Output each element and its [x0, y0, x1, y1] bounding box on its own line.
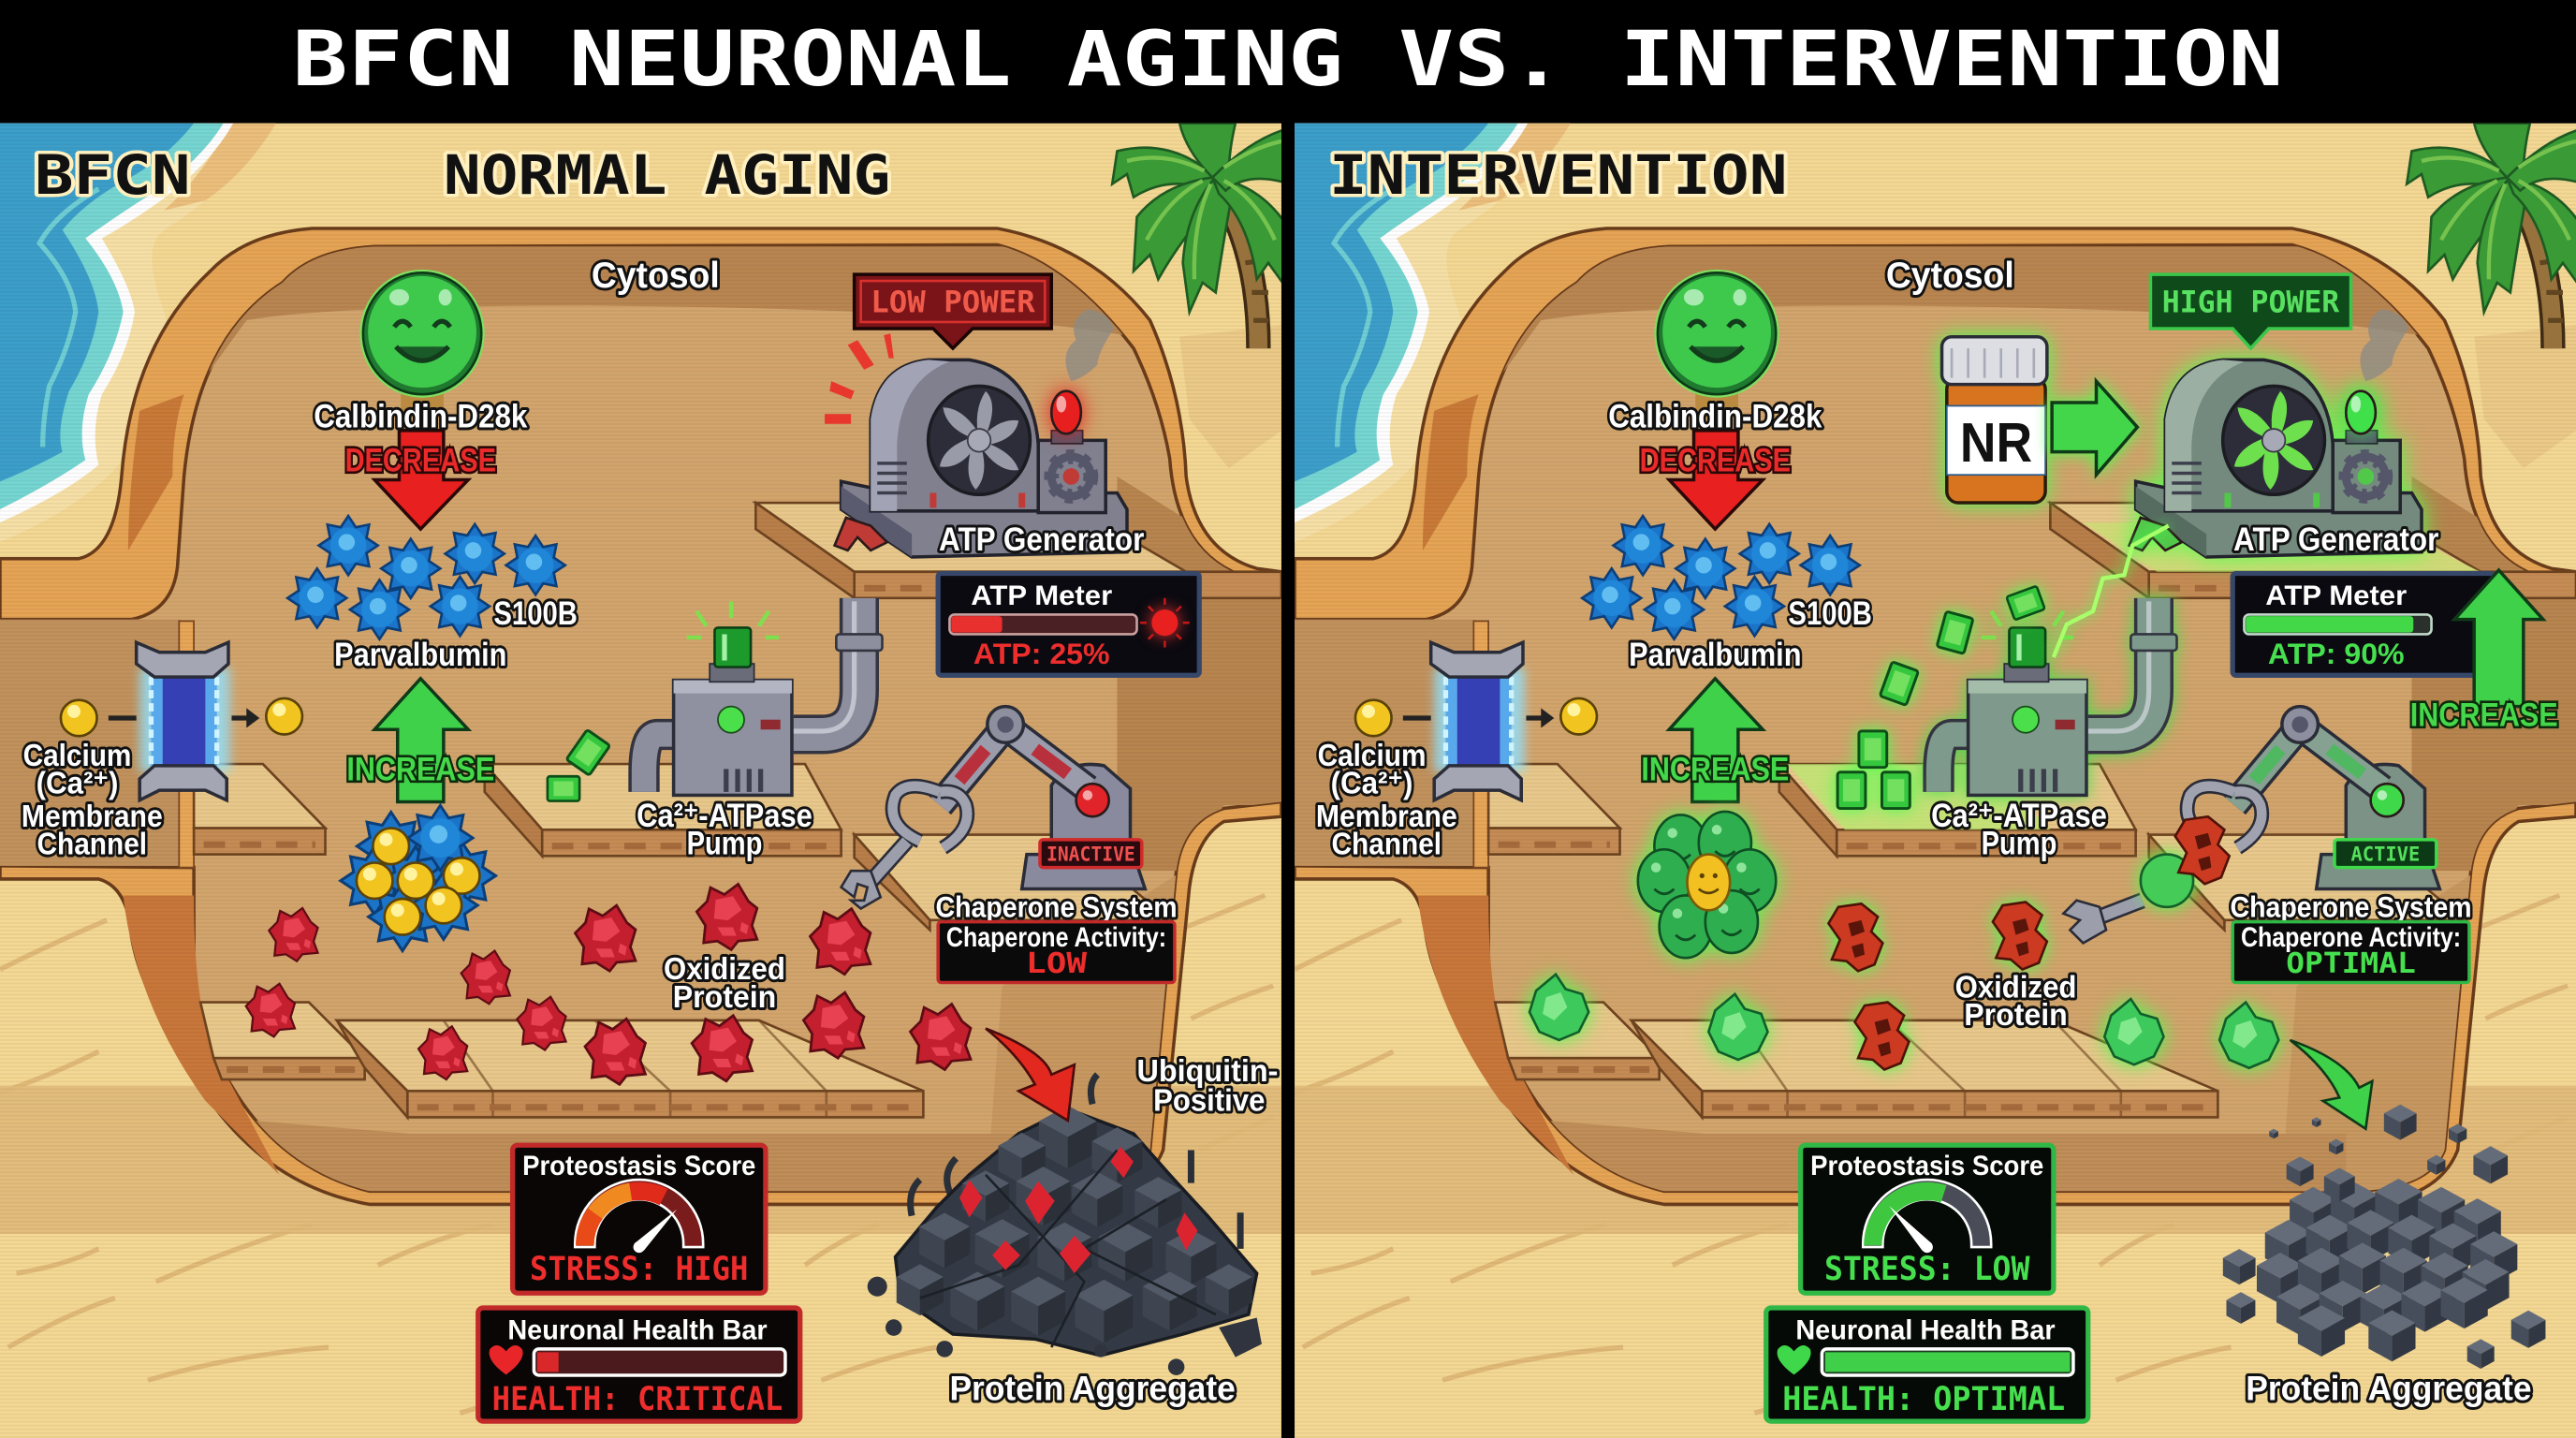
ATP cells [548, 729, 610, 801]
protein aggregate pile [868, 1075, 1262, 1375]
neuronal health bar [1766, 1308, 2088, 1421]
misfolded proteins [1828, 902, 2047, 1070]
membrane channel and calcium [1355, 642, 1597, 800]
label: oxidized protein: Oxidized [1955, 970, 2076, 1005]
smoke [1065, 309, 1114, 381]
beach and cell scenery [1295, 124, 2576, 1438]
ATP meter: ATP Meter [2265, 580, 2408, 611]
big increase arrow [2454, 570, 2543, 707]
label: membrane channel: Membrane [22, 800, 163, 834]
increase arrow [374, 679, 468, 801]
NR pill bottle: NR [1960, 411, 2032, 474]
ATP generator [2130, 360, 2422, 557]
increase arrow [1669, 679, 1763, 801]
chaperone activity [938, 922, 1175, 983]
neuronal health bar: Neuronal Health Bar [1795, 1314, 2056, 1345]
smiling protein cluster [1638, 812, 1776, 958]
label: protein aggregate: Protein Aggregate [2246, 1369, 2532, 1407]
label: calbindin: Calbindin-D28k [314, 398, 528, 434]
ATP meter [2232, 574, 2494, 675]
label: parvalbumin: Parvalbumin [1629, 637, 1801, 673]
panel: normal aging [0, 124, 1290, 1438]
ATP meter [938, 574, 1199, 675]
title: BFCN NEURONAL AGING VS. INTERVENTION [292, 16, 2284, 104]
label: oxidized protein [1955, 970, 2076, 1033]
label: calcium [23, 739, 131, 801]
membrane channel and calcium [61, 642, 302, 800]
label: cytosol: Cytosol [592, 256, 720, 296]
beach and cell scenery [0, 124, 1290, 1438]
neuronal health bar: HEALTH: CRITICAL [492, 1380, 783, 1418]
label: increase: INCREASE [2410, 697, 2558, 734]
S100B proteins [1582, 516, 1860, 639]
label: S100B: S100B [493, 595, 578, 632]
lightning [2054, 526, 2169, 657]
heading: BFCN: BFCN [35, 143, 191, 207]
label: pump [1931, 798, 2107, 862]
neuronal health bar [478, 1308, 800, 1421]
label: chaperone system: Chaperone System [936, 889, 1178, 923]
label: membrane channel: Channel [1332, 828, 1442, 862]
divider [1281, 124, 1295, 1438]
label: calcium: Calcium [1318, 739, 1426, 773]
refolded proteins [1530, 975, 2278, 1068]
chaperone activity [2232, 922, 2469, 983]
label: high power: HIGH POWER [2162, 286, 2340, 319]
label: decrease: DECREASE [345, 443, 496, 479]
smoke [2360, 309, 2408, 381]
pump [644, 598, 882, 795]
label: ubiquitin-positive [1137, 1054, 1278, 1118]
title bar [0, 0, 2576, 124]
proteostasis score [1801, 1145, 2054, 1293]
dissolving aggregate cubes [2223, 1105, 2545, 1369]
label: S100B: S100B [1788, 595, 1872, 632]
ATP meter: ATP: 25% [973, 637, 1110, 670]
label: membrane channel [22, 800, 163, 862]
label: decrease: DECREASE [1640, 443, 1791, 479]
label: pump: Ca²⁺-ATPase [1931, 798, 2107, 834]
proteostasis score: STRESS: HIGH [530, 1250, 748, 1288]
label: increase: INCREASE [1641, 752, 1789, 788]
calbindin smiley [1654, 270, 1779, 418]
label: chaperone system: Chaperone System [2231, 889, 2472, 923]
label: pump: Pump [1982, 826, 2056, 862]
label: ATP generator: ATP Generator [939, 521, 1145, 558]
label: high power [2150, 274, 2351, 348]
decrease arrow [1669, 431, 1763, 529]
misfolded protein in gripper [2175, 816, 2230, 884]
label: pump: Pump [687, 826, 762, 862]
label: calcium: (Ca²⁺) [37, 767, 118, 801]
proteostasis score: STRESS: LOW [1824, 1250, 2030, 1288]
label: ATP generator: ATP Generator [2233, 521, 2439, 558]
label: membrane channel: Membrane [1316, 800, 1457, 834]
label: pump [637, 798, 812, 862]
oxidized proteins [246, 884, 971, 1084]
ATP generator [835, 360, 1127, 557]
label: oxidized protein [664, 952, 785, 1015]
green arrow to aggregate [2291, 1040, 2372, 1129]
chaperone activity: LOW [1026, 947, 1087, 980]
ATP meter: ATP: 90% [2268, 637, 2405, 670]
chaperone arm [2188, 707, 2439, 888]
label: calcium [1318, 739, 1426, 801]
S100B proteins [287, 516, 565, 639]
warning sparks [825, 333, 894, 424]
proteostasis score: Proteostasis Score [1810, 1151, 2043, 1181]
label: oxidized protein: Protein [673, 980, 776, 1015]
proteostasis score [513, 1145, 766, 1293]
label: ubiquitin-positive: Ubiquitin- [1137, 1054, 1278, 1089]
wrench [842, 842, 907, 909]
red arrow to aggregate [986, 1029, 1075, 1121]
label: increase: INCREASE [346, 752, 494, 788]
decrease arrow [374, 431, 468, 529]
active tag: ACTIVE [2351, 843, 2420, 866]
pump [1939, 598, 2177, 795]
label: oxidized protein: Oxidized [664, 952, 785, 987]
NR pill bottle [1942, 337, 2047, 503]
heading: normal aging: NORMAL AGING [444, 143, 890, 207]
calbindin smiley [359, 270, 485, 418]
label: membrane channel: Channel [37, 828, 147, 862]
chaperone activity: Chaperone Activity: [2241, 922, 2461, 953]
proteostasis score: Proteostasis Score [522, 1151, 755, 1181]
active tag [2334, 840, 2437, 868]
neuronal health bar: HEALTH: OPTIMAL [1782, 1380, 2065, 1418]
label: membrane channel [1316, 800, 1457, 862]
label: calcium: Calcium [23, 739, 131, 773]
ATP cells [1837, 586, 2045, 809]
label: protein aggregate: Protein Aggregate [949, 1369, 1236, 1407]
label: parvalbumin: Parvalbumin [334, 637, 506, 673]
chaperone arm [893, 707, 1145, 888]
calcium-bound cluster [341, 805, 496, 951]
label: ubiquitin-positive: Positive [1153, 1083, 1265, 1118]
label: cytosol: Cytosol [1886, 256, 2014, 296]
label: low power [855, 274, 1051, 348]
heading: intervention: INTERVENTION [1329, 143, 1788, 207]
panel: intervention [1295, 124, 2576, 1438]
green platform glow under generator [2083, 522, 2481, 572]
label: oxidized protein: Protein [1964, 998, 2068, 1033]
ATP meter: ATP Meter [971, 580, 1113, 611]
label: calcium: (Ca²⁺) [1331, 767, 1412, 801]
chaperone activity: OPTIMAL [2286, 947, 2416, 980]
label: calbindin: Calbindin-D28k [1608, 398, 1822, 434]
label: low power: LOW POWER [871, 286, 1036, 319]
wrench and ball [2063, 855, 2193, 943]
neuronal health bar: Neuronal Health Bar [507, 1314, 768, 1345]
chaperone activity: Chaperone Activity: [946, 922, 1166, 953]
label: pump: Ca²⁺-ATPase [637, 798, 812, 834]
inactive tag: INACTIVE [1046, 843, 1135, 866]
arrow: NR to generator [2052, 381, 2137, 475]
green platform glow [1788, 764, 2050, 829]
